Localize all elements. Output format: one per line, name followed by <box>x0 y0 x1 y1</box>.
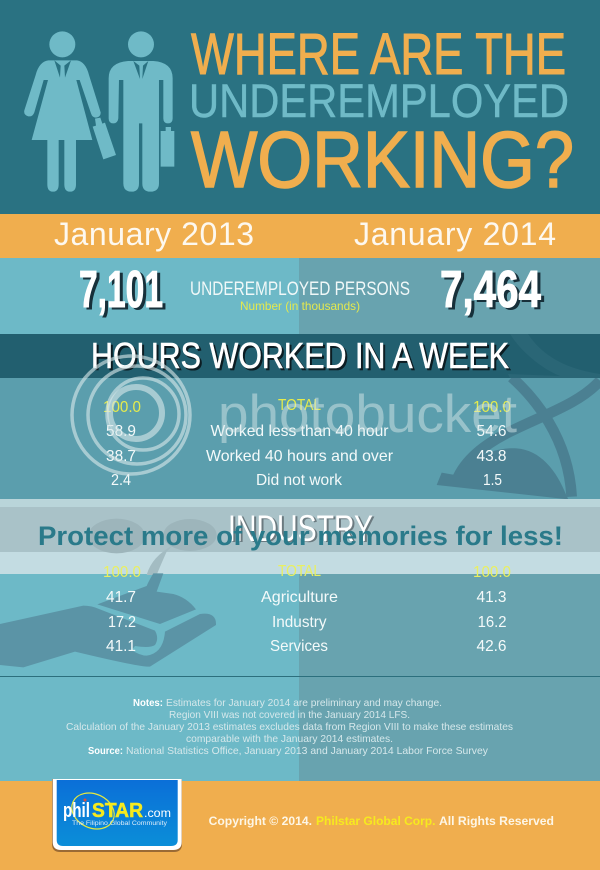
notes: Estimates for January 2014 are preliminary and may change. <box>166 697 442 709</box>
table: industry: 41.3 <box>476 589 507 606</box>
table: hours worked: 43.8 <box>476 448 507 465</box>
table: hours worked: 1.5 <box>483 472 502 489</box>
table: hours worked: 100.0 <box>473 399 511 416</box>
table: industry: 42.6 <box>476 638 507 655</box>
notes: Calculation of the January 2013 estimates excludes data from Region VIII to make these estimates <box>66 721 513 733</box>
panel: industry background <box>0 574 600 781</box>
date headings: January 2014 <box>354 216 556 252</box>
notes: Notes: <box>133 697 163 709</box>
table: industry: 41.7 <box>106 589 136 606</box>
label: underemployed persons <box>190 279 410 313</box>
table: industry: 100.0 <box>103 564 141 581</box>
table: industry: TOTAL <box>278 563 321 580</box>
table: hours worked: Worked 40 hours and over <box>206 448 394 465</box>
copyright <box>209 816 554 828</box>
notes <box>66 697 513 757</box>
table: hours worked: 58.9 <box>106 423 136 440</box>
watermark: photobucket logo <box>72 356 190 474</box>
divider line <box>0 676 600 677</box>
table: industry: Agriculture <box>261 589 338 606</box>
table: industry: 41.1 <box>106 638 136 655</box>
label: underemployed persons: UNDEREMPLOYED PERSONS <box>190 279 410 300</box>
notes: Source: <box>88 745 123 757</box>
copyright: Philstar Global Corp. <box>316 816 436 828</box>
table: industry: Services <box>270 638 328 655</box>
big number: 2014: 7,464 <box>440 261 541 319</box>
icon: hourglass <box>437 377 600 499</box>
copyright: All Rights Reserved <box>439 816 554 828</box>
table: hours worked <box>103 397 511 489</box>
logo: philSTAR.com: .com <box>144 806 171 820</box>
icon: businesswoman <box>24 31 116 192</box>
heading: hours worked in a week: HOURS WORKED IN A WEEK <box>91 335 509 376</box>
table: industry: 16.2 <box>478 614 507 631</box>
panel: hours worked background <box>0 378 600 499</box>
logo: philSTAR.com: phil <box>63 800 90 822</box>
table: industry: 100.0 <box>473 564 511 581</box>
panel: date bar <box>0 214 600 258</box>
table: hours worked: TOTAL <box>278 397 321 414</box>
icon: businessman <box>109 31 174 192</box>
copyright: Copyright © 2014. <box>209 816 312 828</box>
icon: hourglass top <box>508 334 600 378</box>
label: underemployed persons: Number (in thousands) <box>240 299 360 313</box>
notes: Region VIII was not covered in the January 2014 LFS. <box>169 709 410 721</box>
table: hours worked: Did not work <box>256 472 343 489</box>
table: industry: Industry <box>272 614 326 631</box>
logo: philSTAR.com: The Filipino Global Community <box>72 820 168 827</box>
table: industry <box>103 563 511 655</box>
table: industry: 17.2 <box>108 614 136 631</box>
panel: underemployed persons background <box>0 258 600 334</box>
logo: philSTAR.com: STAR <box>92 800 144 822</box>
table: hours worked: 100.0 <box>103 399 141 416</box>
heading: industry: INDUSTRY <box>228 508 373 549</box>
table: hours worked: Worked less than 40 hour <box>210 423 389 440</box>
table: hours worked: 38.7 <box>106 448 136 465</box>
panel: footer <box>0 781 600 870</box>
table: hours worked: 2.4 <box>111 472 131 489</box>
panel: hours heading band <box>0 334 600 378</box>
date headings <box>54 216 556 252</box>
notes: National Statistics Office, January 2013 and January 2014 Labor Force Survey <box>126 745 489 757</box>
panel: watermark strips <box>0 499 600 574</box>
table: hours worked: 54.6 <box>476 423 507 440</box>
watermark: protect more: Protect more of your memories for less! <box>38 521 563 551</box>
panel: header background <box>0 0 600 214</box>
icon: hand holding plant <box>0 519 217 667</box>
big number: 2013: 7,101 <box>79 261 163 319</box>
notes: comparable with the January 2014 estimates. <box>186 733 393 745</box>
title <box>189 22 574 204</box>
logo: philSTAR.com <box>52 779 182 852</box>
date headings: January 2013 <box>54 216 254 252</box>
watermark: photobucket text: photobucket <box>218 385 517 444</box>
